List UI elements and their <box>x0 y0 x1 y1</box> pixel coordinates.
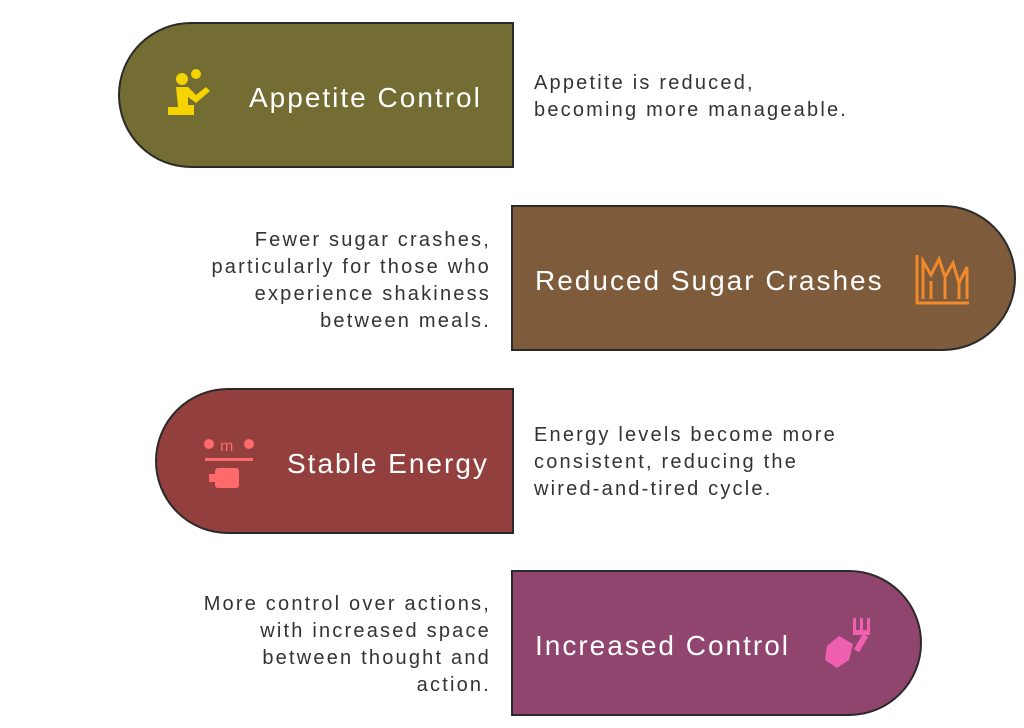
title: Increased Control: Increased Control <box>535 630 790 661</box>
panel: increased control <box>511 570 922 716</box>
icon: battery <box>204 438 254 488</box>
text: sugar crashes description: between meals. <box>320 310 491 332</box>
panel: stable energy <box>155 388 514 534</box>
text: control description: More control over actions, <box>204 593 491 615</box>
text: energy description: wired-and-tired cycle. <box>534 478 772 500</box>
text: control description: action. <box>417 674 491 696</box>
text: sugar crashes description: particularly for those who <box>211 256 491 278</box>
text: energy description: Energy levels become more <box>534 424 837 446</box>
text: sugar crashes description <box>211 229 491 332</box>
icon: person kneeling <box>168 69 210 115</box>
panel: reduced sugar crashes <box>511 205 1016 351</box>
text: control description: with increased space <box>260 620 491 642</box>
text: energy description: consistent, reducing the <box>534 451 798 473</box>
text: appetite description: becoming more manageable. <box>534 99 848 121</box>
icon: battery: m <box>220 438 235 455</box>
text: appetite description <box>534 72 848 121</box>
text: sugar crashes description: Fewer sugar crashes, <box>255 229 491 251</box>
icon: hand with fork <box>825 618 870 668</box>
panel: appetite control <box>118 22 514 168</box>
text: sugar crashes description: experience shakiness <box>255 283 491 305</box>
title: Reduced Sugar Crashes: Reduced Sugar Crashes <box>535 265 884 296</box>
title: Stable Energy: Stable Energy <box>287 448 489 479</box>
icon: crashing chart <box>916 255 969 304</box>
text: appetite description: Appetite is reduced, <box>534 72 755 94</box>
text: control description: between thought and <box>262 647 491 669</box>
title: Appetite Control: Appetite Control <box>249 82 482 113</box>
text: energy description <box>534 424 837 500</box>
text: control description <box>204 593 491 696</box>
